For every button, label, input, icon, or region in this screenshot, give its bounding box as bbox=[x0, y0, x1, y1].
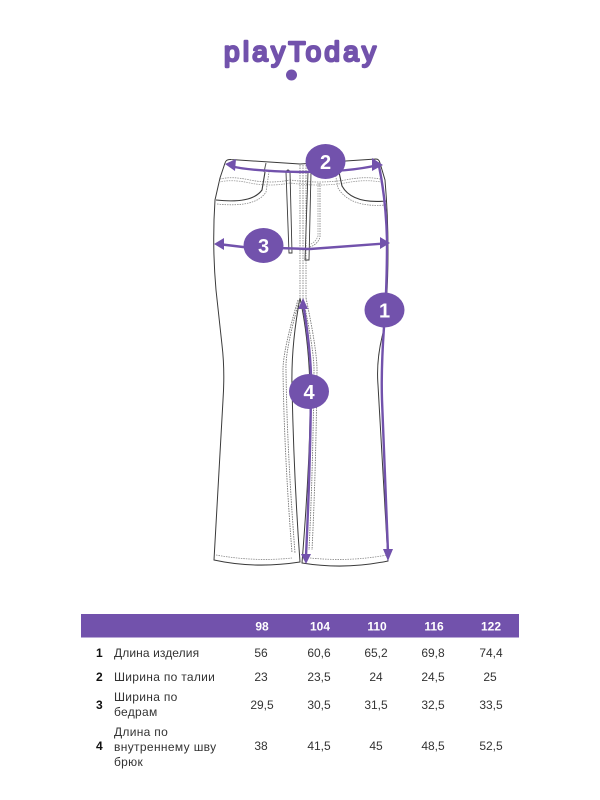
row 4: 52,5 bbox=[479, 739, 503, 753]
row 4: 45 bbox=[369, 739, 383, 753]
measurement 4: inseam length bbox=[289, 298, 329, 564]
row 2: Ширина по талии bbox=[114, 670, 215, 684]
row 2: 23,5 bbox=[307, 670, 331, 684]
row 2 bbox=[96, 670, 497, 684]
row 3: 29,5 bbox=[250, 698, 274, 712]
row 2: 25 bbox=[483, 670, 497, 684]
row 3: 3 bbox=[96, 698, 103, 712]
size table bbox=[81, 614, 519, 769]
row 1: Длина изделия bbox=[114, 646, 199, 660]
row 1 bbox=[96, 646, 503, 660]
row 4: 41,5 bbox=[307, 739, 331, 753]
row 2: 2 bbox=[96, 670, 103, 684]
row 3: 31,5 bbox=[364, 698, 388, 712]
logo: playToday bbox=[224, 36, 376, 80]
row 4: внутреннему шву bbox=[114, 740, 216, 754]
row 3 bbox=[96, 690, 503, 719]
table header: 98 bbox=[255, 620, 269, 634]
row 1: 69,8 bbox=[421, 646, 445, 660]
measurement 1: garment length: 1 bbox=[379, 300, 390, 322]
row 3: бедрам bbox=[114, 705, 158, 719]
row 2: 23 bbox=[254, 670, 268, 684]
row 4 bbox=[96, 725, 503, 769]
row 3: Ширина по bbox=[114, 690, 178, 704]
row 2: 24,5 bbox=[421, 670, 445, 684]
table header: 110 bbox=[367, 620, 387, 634]
table header: 122 bbox=[481, 620, 501, 634]
table header: 116 bbox=[424, 620, 444, 634]
row 4: 48,5 bbox=[421, 739, 445, 753]
row 4: Длина по bbox=[114, 725, 168, 739]
table header bbox=[81, 614, 519, 638]
row 3: 30,5 bbox=[307, 698, 331, 712]
row 4: брюк bbox=[114, 755, 143, 769]
row 1: 56 bbox=[254, 646, 268, 660]
row 4: 38 bbox=[254, 739, 268, 753]
row 3: 33,5 bbox=[479, 698, 503, 712]
row 1: 60,6 bbox=[307, 646, 331, 660]
pants technical drawing bbox=[214, 159, 388, 566]
row 4: 4 bbox=[96, 739, 103, 753]
measurement 2: waist width: 2 bbox=[320, 152, 331, 174]
row 1: 74,4 bbox=[479, 646, 503, 660]
row 1: 65,2 bbox=[364, 646, 388, 660]
measurement 4: inseam length: 4 bbox=[303, 382, 315, 404]
measurement 3: hip width: 3 bbox=[258, 236, 269, 258]
table header: 104 bbox=[310, 620, 330, 634]
row 2: 24 bbox=[369, 670, 383, 684]
row 1: 1 bbox=[96, 646, 103, 660]
logo: playToday: playToday bbox=[224, 36, 376, 67]
measurement 1: garment length bbox=[364, 166, 404, 561]
measurement 2: waist width bbox=[225, 144, 383, 179]
row 3: 32,5 bbox=[421, 698, 445, 712]
measurement 3: hip width bbox=[214, 228, 390, 263]
